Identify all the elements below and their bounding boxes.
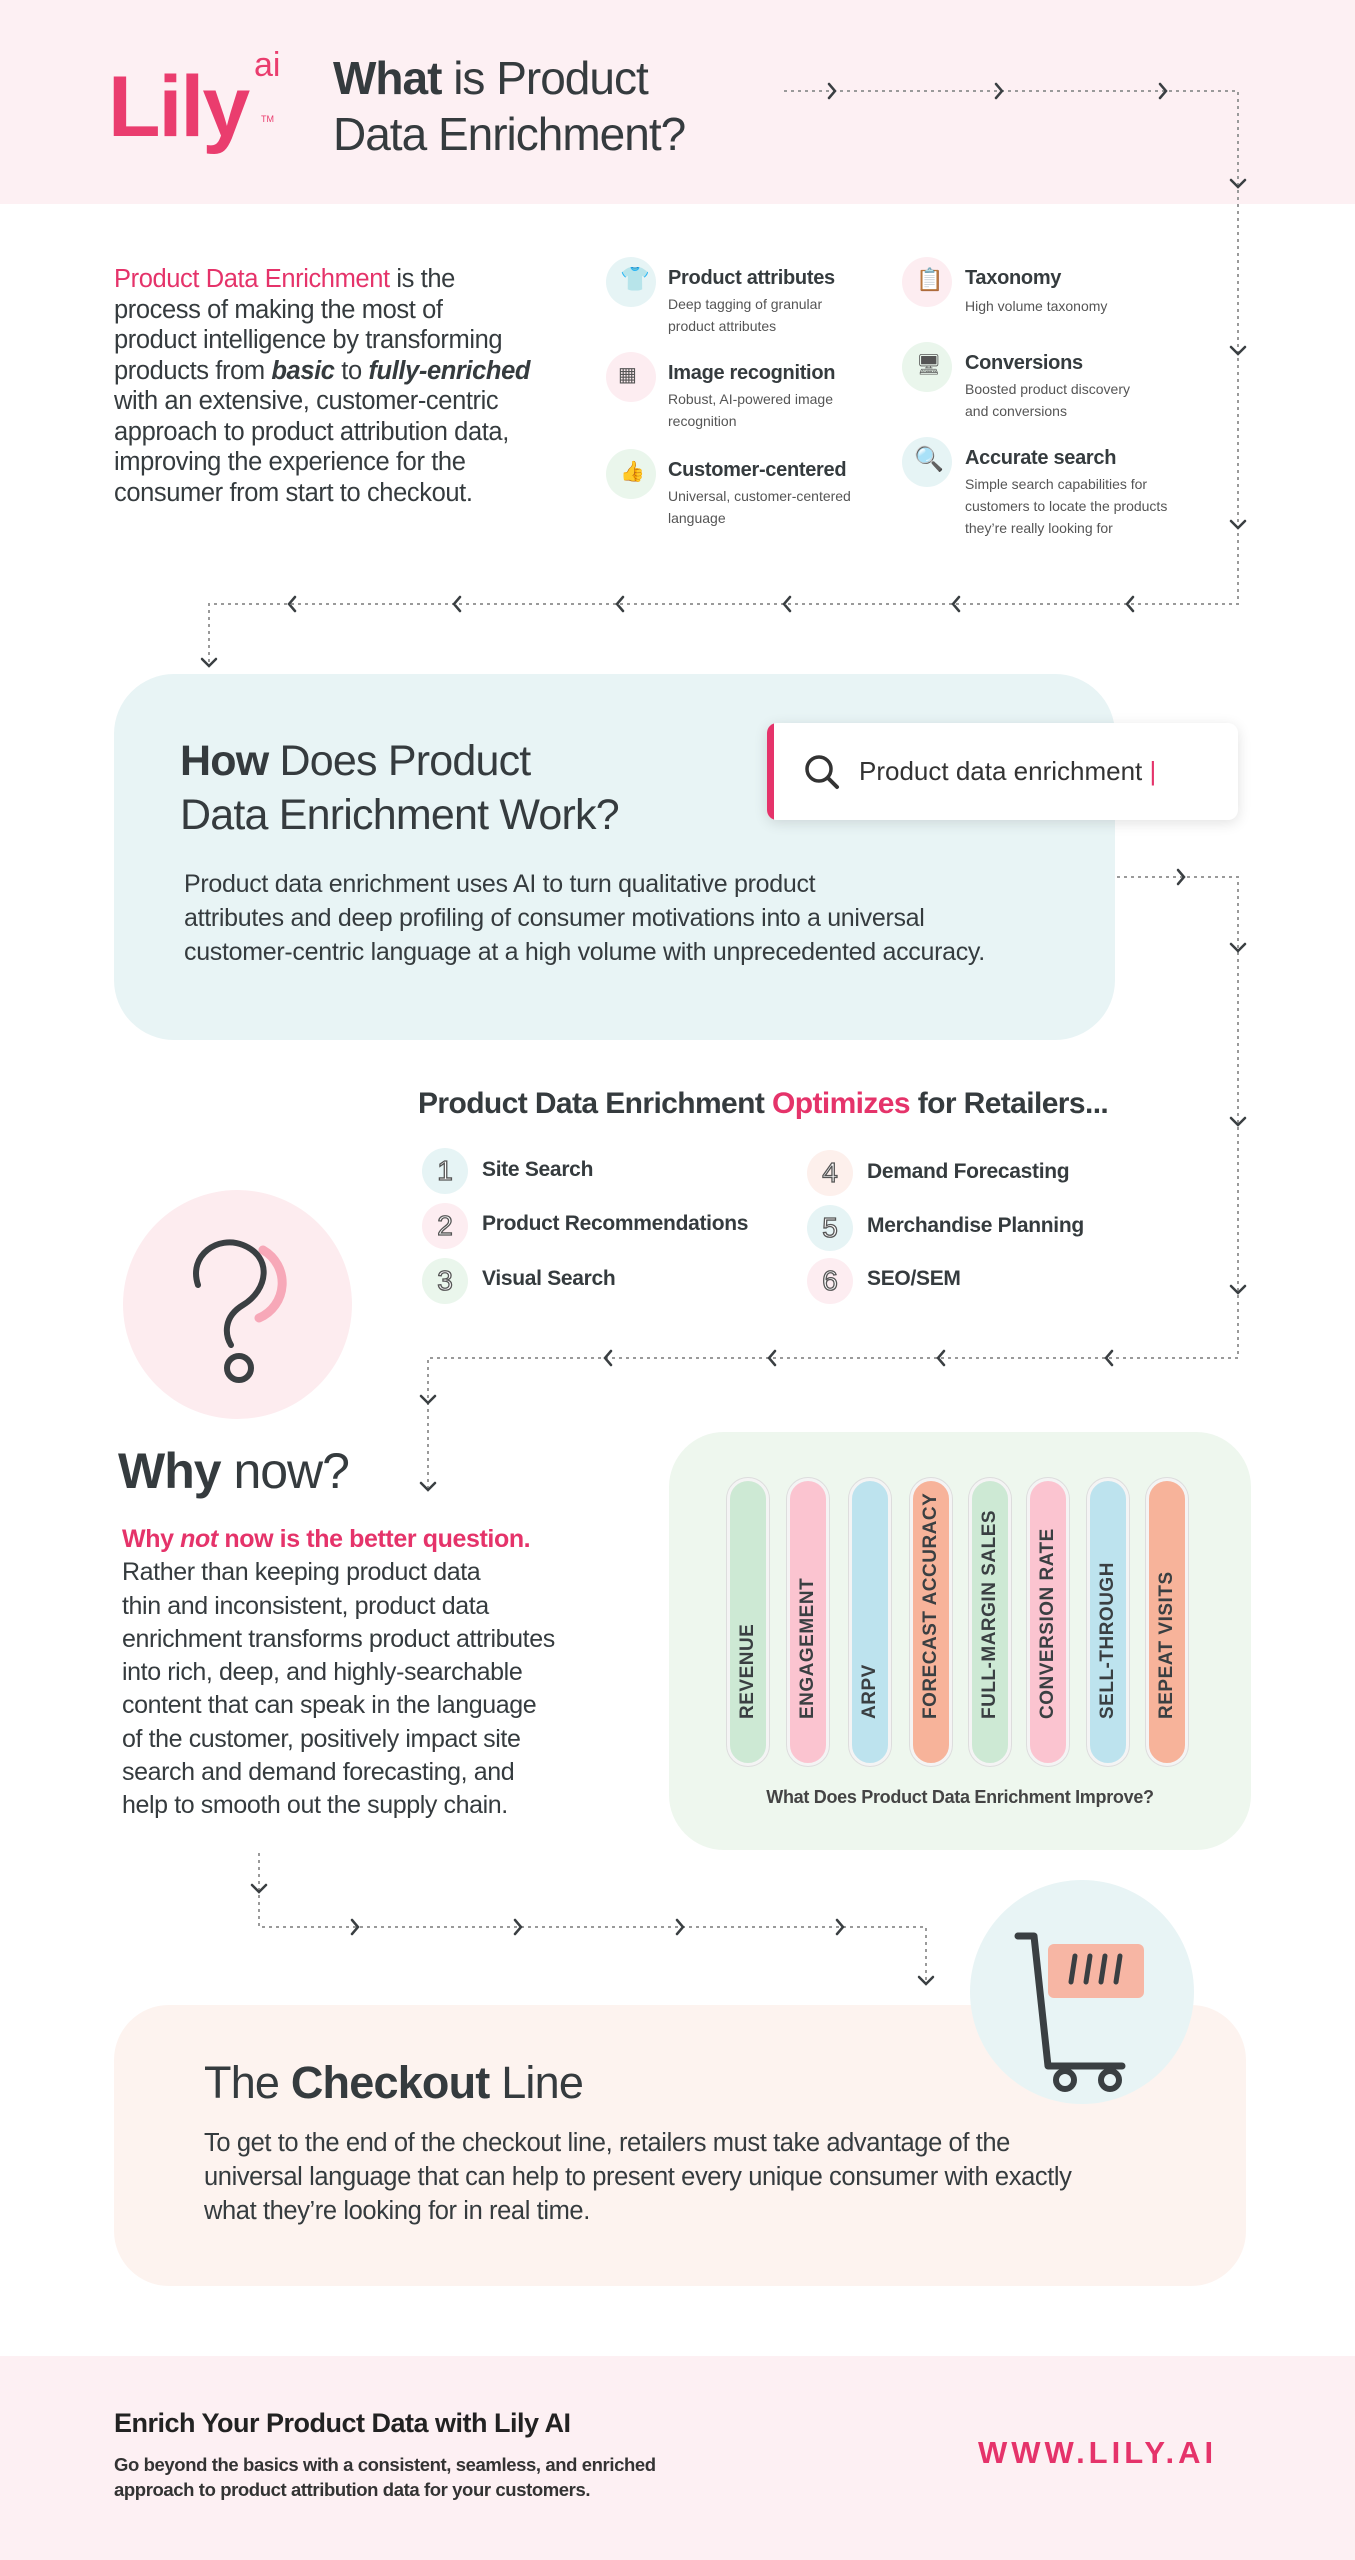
optimizes list: 3 [437,1265,453,1296]
feature: conversions [902,342,1130,419]
heading: How Does Product [180,737,530,785]
feature: product attributes: Deep tagging of granular [668,296,822,312]
body: attributes and deep profiling of consumer motivations into a universal [184,904,925,932]
optimizes list: Merchandise Planning [867,1214,1084,1237]
footer body: Go beyond the basics with a consistent, seamless, and enriched [114,2454,656,2475]
why now body: of the customer, positively impact site [122,1725,520,1753]
why now body: Why not now is the better question. [122,1525,530,1553]
feature: taxonomy: High volume taxonomy [965,298,1107,314]
features grid: recognition [668,413,736,429]
why now body: help to smooth out the supply chain. [122,1791,508,1819]
feature: customer-centered: 👍 [620,461,645,483]
feature: product attributes: 👕 [620,266,650,293]
why now body: thin and inconsistent, product data [122,1592,489,1620]
feature: accurate search: customers to locate the products [965,498,1167,514]
panel: improvement chart [669,1432,1251,1850]
optimizes list: Site Search [482,1158,593,1181]
heading [180,737,619,839]
body: Product data enrichment uses AI to turn qualitative product [184,870,815,898]
feature: conversions: Boosted product discovery [965,381,1130,397]
feature: conversions: 🖥 [916,354,941,376]
panel: how it works [114,674,1115,1040]
why now body [122,1525,555,1819]
footer body: approach to product attribution data for your customers. [114,2479,590,2500]
icon: question mark circle [123,1190,352,1419]
feature: accurate search: Simple search capabilities for [965,476,1147,492]
footer body [114,2454,656,2500]
optimizes list [422,1148,1084,1304]
feature: customer-centered: Universal, customer-centered [668,488,851,504]
logo: ai [254,46,280,84]
features grid [606,257,1167,536]
bar chart: REVENUE [737,1624,758,1719]
title: Data Enrichment? [333,108,685,160]
optimizes list: Demand Forecasting [867,1160,1069,1183]
bar chart: REPEAT VISITS [1156,1571,1177,1719]
intro text: with an extensive, customer-centric [114,387,498,415]
features grid: they’re really looking for [965,520,1113,536]
footer title: Enrich Your Product Data with Lily AI [114,2408,571,2438]
features grid: product attributes [668,318,776,334]
optimizes list: Product Recommendations [482,1212,748,1235]
footer band [0,2356,1355,2560]
why now body: search and demand forecasting, and [122,1758,514,1786]
feature: image recognition: ▦ [618,364,637,386]
feature: product attributes [606,257,835,334]
why now body: enrichment transforms product attributes [122,1625,555,1653]
heading: why now: Why now? [118,1443,349,1499]
optimizes list: 5 [822,1212,838,1243]
feature: customer-centered [606,449,851,526]
icon: shopping cart [970,1880,1194,2104]
why now body: content that can speak in the language [122,1691,536,1719]
optimizes list: SEO/SEM [867,1267,961,1290]
bar chart: FULL-MARGIN SALES [979,1510,1000,1719]
intro text: improving the experience for the [114,448,465,476]
footer url: WWW.LILY.AI [978,2435,1217,2470]
feature: image recognition [606,352,835,429]
header band [0,0,1355,204]
optimizes list: 1 [437,1155,453,1186]
chart caption: What Does Product Data Enrichment Improve? [766,1787,1154,1807]
feature: conversions: Conversions [965,352,1083,374]
bar chart [726,1477,1189,1767]
optimizes list: Visual Search [482,1267,615,1290]
optimizes list: 2 [437,1210,453,1241]
title [333,52,685,160]
optimizes heading: Product Data Enrichment Optimizes for Retailers... [418,1087,1108,1120]
heading: The Checkout Line [204,2057,583,2108]
bar chart: ENGAGEMENT [797,1578,818,1719]
intro text: process of making the most of [114,296,443,324]
feature: customer-centered: Customer-centered [668,459,846,481]
logo: TM [261,114,274,124]
body: To get to the end of the checkout line, retailers must take advantage of the [204,2129,1010,2157]
feature: taxonomy: Taxonomy [965,267,1061,289]
body: customer-centric language at a high volume with unprecedented accuracy. [184,938,985,966]
title: What is Product [333,52,648,104]
feature: taxonomy: 📋 [916,267,943,292]
feature: accurate search: Accurate search [965,447,1116,469]
why now body: Rather than keeping product data [122,1558,480,1586]
intro text: Product Data Enrichment is the [114,265,455,293]
optimizes list: 6 [822,1265,838,1296]
search box: Product data enrichment | [859,756,1156,786]
panel: checkout line [114,2005,1246,2286]
body [184,870,985,966]
optimizes list: 4 [822,1157,838,1188]
heading: Data Enrichment Work? [180,791,619,839]
feature: accurate search [902,437,1167,536]
bar chart: ARPV [859,1664,880,1719]
body: universal language that can help to present every unique consumer with exactly [204,2163,1072,2191]
feature: taxonomy [902,257,1108,314]
features grid: and conversions [965,403,1067,419]
feature: product attributes: Product attributes [668,267,835,289]
body [204,2129,1072,2225]
features grid: language [668,510,726,526]
feature: image recognition: Image recognition [668,362,835,384]
feature: accurate search: 🔍 [914,446,944,473]
why now body: into rich, deep, and highly-searchable [122,1658,522,1686]
icon: magnifier [805,755,840,790]
intro text [114,265,531,506]
bar chart: FORECAST ACCURACY [920,1493,941,1719]
feature: image recognition: Robust, AI-powered image [668,391,833,407]
intro text: approach to product attribution data, [114,418,509,446]
bar chart: SELL-THROUGH [1097,1562,1118,1719]
intro text: products from basic to fully-enriched [114,356,530,384]
intro text: product intelligence by transforming [114,326,502,354]
intro text: consumer from start to checkout. [114,478,473,506]
body: what they’re looking for in real time. [204,2197,590,2225]
logo: Lily [108,59,248,155]
bar chart: CONVERSION RATE [1037,1528,1058,1719]
search box [767,723,1238,820]
